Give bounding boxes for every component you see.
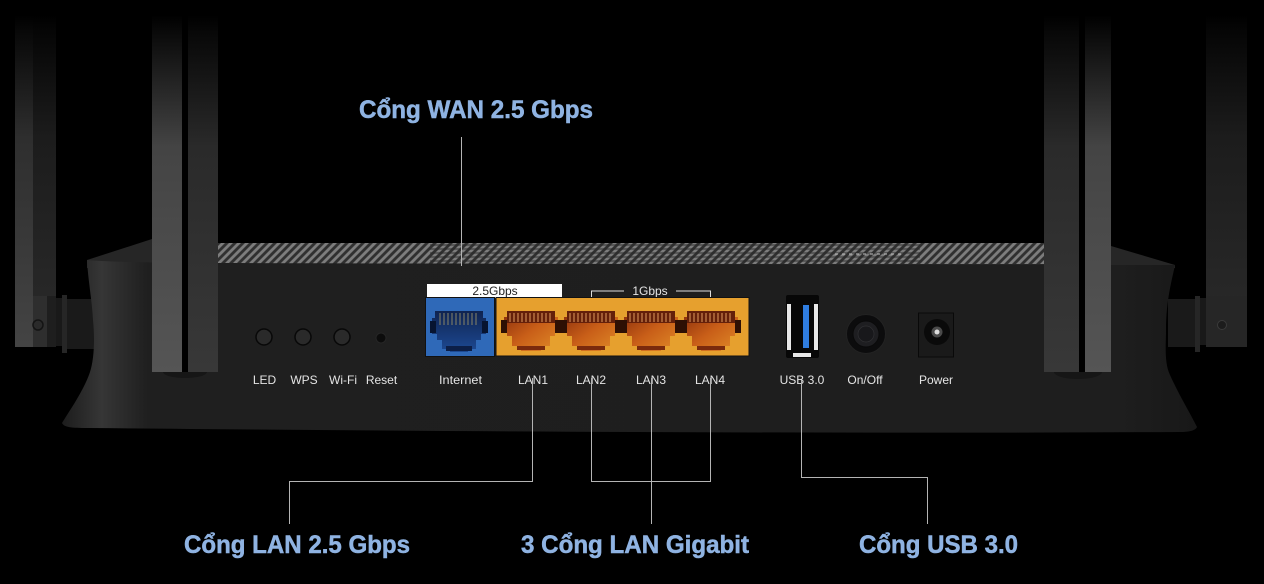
heading: 3 LAN: 3 Cổng LAN Gigabit [521, 531, 750, 559]
heading: USB: Cổng USB 3.0 [859, 531, 1018, 559]
ports: LAN orange [496, 298, 749, 356]
connector lines: 3 LAN gigabit [592, 378, 710, 524]
on/off button [846, 314, 886, 354]
router top mesh [87, 239, 1175, 268]
port labels [439, 373, 953, 387]
status buttons [256, 329, 386, 345]
1Gbps bracket label: 1Gbps [632, 284, 668, 298]
heading: WAN: Cổng WAN 2.5 Gbps [359, 96, 593, 124]
2.5Gbps label [427, 284, 562, 298]
connector line: LAN 2.5G [290, 378, 532, 524]
button labels: Wi-Fi [329, 373, 357, 387]
button labels [253, 373, 398, 387]
port labels: On/Off [847, 373, 883, 387]
port: WAN internet blue [426, 298, 494, 356]
power jack [918, 313, 954, 357]
port labels: USB 3.0 [780, 373, 825, 387]
outer left antenna [15, 15, 56, 347]
button labels: LED [253, 373, 277, 387]
button labels: WPS [290, 373, 318, 387]
port labels: LAN4 [695, 373, 725, 387]
left antenna hinge [56, 295, 94, 353]
connector line: WAN [460, 137, 462, 266]
port labels: LAN1 [518, 373, 548, 387]
inner right antenna [1044, 0, 1111, 379]
inner left antenna [152, 0, 218, 378]
outer right antenna [1206, 15, 1247, 347]
port labels: Internet [439, 373, 483, 387]
port labels: LAN3 [636, 373, 666, 387]
router body [62, 260, 1197, 433]
connector line: USB [802, 380, 928, 524]
right antenna hinge [1168, 296, 1206, 352]
button labels: Reset [366, 373, 398, 387]
2.5Gbps label: 2.5Gbps [472, 284, 518, 298]
heading: LAN 2.5G: Cổng LAN 2.5 Gbps [184, 531, 410, 559]
USB 3.0 port [786, 295, 819, 358]
port labels: Power [919, 373, 953, 387]
port labels: LAN2 [576, 373, 606, 387]
1Gbps bracket label [592, 284, 710, 298]
